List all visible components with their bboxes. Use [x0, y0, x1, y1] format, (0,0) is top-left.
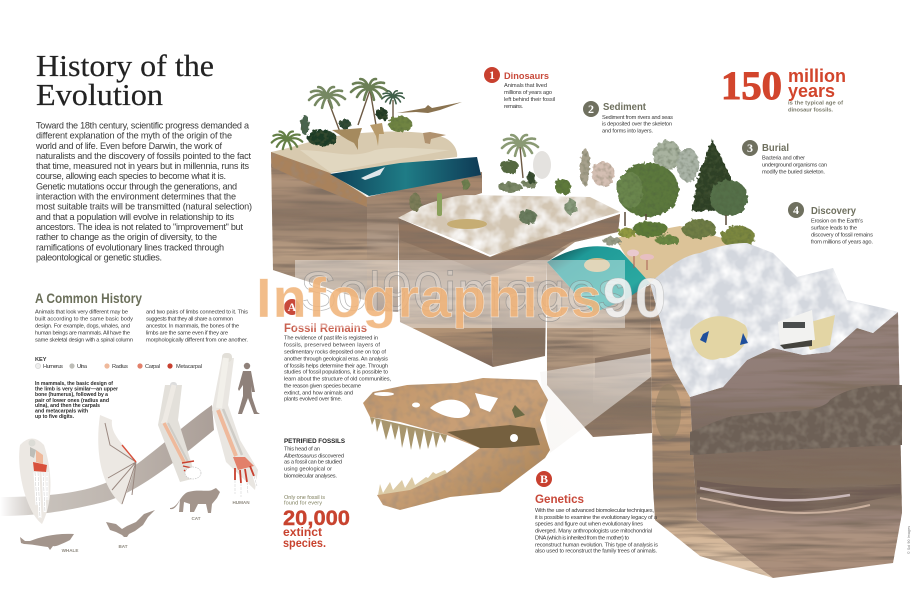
text: petrified fossils: PETRIFIED FOSSILS: [284, 438, 346, 445]
panel: genetics: With the use of advanced biomolecular techniques,: [535, 508, 654, 514]
species labels: HUMAN: [232, 500, 250, 505]
callout: 20,000 extinct species: [283, 495, 350, 550]
text: common history column 1: built according to the same basic body: [35, 316, 133, 322]
callout: 20,000 extinct species: found for every: [284, 500, 322, 506]
title: History of the: [36, 48, 214, 83]
limb: human arm: [212, 353, 258, 497]
step 3: burial: [742, 140, 827, 176]
panel: a common history: [0, 291, 260, 553]
heading: fossil remains: Fossil Remains: [284, 323, 367, 335]
skull fossil: [363, 378, 550, 510]
step 4: discovery: discovery of fossil remains: [811, 232, 873, 238]
text: fossil remains body: another through geological eras. An analysis: [284, 356, 388, 362]
silhouette: human: [238, 363, 260, 414]
panel: genetics: [535, 471, 658, 554]
heading: a common history: A Common History: [35, 291, 142, 306]
step 4: discovery: Discovery: [811, 206, 857, 217]
buried strata: [690, 385, 902, 455]
intro text block: and that a population will evolve in relationship to its: [36, 212, 234, 222]
intro text block: naturalists and the discovery of fossils pointed to the fact: [36, 151, 251, 161]
title: [36, 48, 214, 112]
text: limb design note: up to five digits.: [35, 414, 74, 420]
step 2: sediment: is deposited over the skeleton: [602, 122, 672, 128]
text: common history column 1: Animals that look very different may be: [35, 310, 128, 316]
legend: bone key: [35, 357, 202, 370]
text: limb design note: In mammals, the basic design of: [35, 381, 113, 387]
lower teeth: [378, 470, 447, 495]
icon: step 3 badge: 3: [747, 141, 753, 155]
text: fossil remains body: extinct, and how animals and: [284, 390, 353, 396]
panel: genetics: Genetics: [535, 494, 584, 506]
step 1: dinosaurs: Dinosaurs: [504, 71, 549, 82]
intro text block: different explanation of the myth of the origin of the: [36, 131, 232, 141]
intro text block: [35, 120, 252, 262]
species labels: WHALE: [62, 548, 78, 553]
text: common history column 2: suggests that they all share a common: [146, 316, 233, 322]
step 1: dinosaurs: Animals that lived: [504, 83, 547, 89]
title: Evolution: [36, 77, 164, 112]
text: petrified fossils: [283, 438, 346, 480]
text: fossil remains body: [284, 336, 391, 402]
legend: bone key: Ulna: [77, 364, 88, 370]
text: fossil remains body: fossils, preserved between layers of: [284, 342, 380, 348]
step 1: dinosaurs: millions of years ago: [504, 90, 552, 96]
watermark: Infographics90: [256, 266, 666, 329]
panel: genetics: it is possible to examine the evolutionary legacy of a: [535, 515, 658, 521]
species labels: [62, 500, 250, 553]
text: common history column 1: [35, 310, 133, 344]
fossil bed: [447, 219, 487, 229]
icon: A badge: A: [288, 300, 297, 314]
text: fossil remains body: plants evolved over time.: [284, 396, 342, 402]
intro text block: Toward the 18th century, scientific progress demanded a: [36, 120, 250, 130]
text: limb design note: and metacarpals with: [35, 409, 89, 415]
callout: 20,000 extinct species: species.: [283, 536, 326, 550]
callout: 150 million years: 150: [721, 63, 782, 108]
text: limb design note: ulna), and then the carpals: [35, 403, 100, 409]
upper teeth: [370, 417, 447, 450]
species labels: CAT: [191, 516, 201, 521]
callout: 20,000 extinct species: 20,000: [283, 506, 350, 530]
text: fossil remains body: the reason given species became: [284, 384, 361, 390]
intro text block: course, allowing each species to become what it is.: [36, 171, 226, 181]
panel: genetics: DNA (which is inherited from the mother) to: [535, 536, 629, 542]
intro text block: ramifications of evolutionary lines tracked through: [36, 242, 224, 252]
legend: bone key: Humerus: [43, 364, 63, 370]
block 4: discovery: [650, 243, 902, 578]
text: common history column 1: design. For example, dogs, whales, and: [35, 324, 130, 330]
text: fossil remains body: learn about the structure of old communities,: [284, 376, 391, 382]
intro text block: that time, measured not in years but in millennia, runs its: [36, 161, 249, 171]
text: fossil remains body: of fossils helps determine their age. Through: [284, 364, 388, 370]
step 1: dinosaurs: [484, 67, 555, 110]
intro text block: ancestors. The idea is not related to "improvement" but: [36, 222, 243, 232]
block 1: dinosaurs: [271, 79, 482, 312]
step 4: discovery: surface leads to the: [811, 226, 857, 232]
text: common history column 2: [146, 310, 248, 344]
text: common history column 1: human beings are mammals. All have the: [35, 330, 130, 336]
callout: 150 million years: is the typical age of: [788, 100, 843, 106]
panel: genetics: species and figure out when evolutionary lines: [535, 522, 643, 528]
callout: 20,000 extinct species: Only one fossil is: [284, 495, 325, 501]
step 1: dinosaurs: left behind their fossil: [504, 97, 555, 103]
step 2: sediment: Sediment: [603, 102, 647, 113]
evolution band: [0, 405, 214, 516]
text: limb design note: pair of lower ones (radius and: [35, 398, 110, 404]
intro text block: rather to change as the origin of diversity, to the: [36, 232, 217, 242]
legend: bone key: Radius: [112, 364, 128, 370]
text: fossil remains body: The evidence of past life is registered in: [284, 336, 378, 342]
block 3: lagoon: [547, 246, 654, 437]
fossil light cone: [540, 350, 680, 453]
watermark: Sol90images: [300, 260, 625, 322]
silhouette: bat: [106, 510, 155, 537]
text: limb design note: the limb is very similar—an upper: [35, 387, 119, 393]
desert plants: [409, 135, 577, 224]
step 3: burial: Burial: [762, 143, 789, 154]
text: petrified fossils: as a fossil can be studied: [284, 460, 342, 466]
step 4: discovery: Erosion on the Earth's: [811, 218, 863, 224]
rock surface: [650, 243, 898, 397]
step 4: discovery: from millions of years ago.: [811, 240, 873, 246]
palms and plants: [272, 79, 412, 149]
icon: step 4 badge: 4: [793, 203, 799, 217]
intro text block: most suitable traits will be transmitted (natural selection): [36, 202, 252, 212]
legend: bone key: Metacarpal: [176, 364, 202, 370]
icon: step 1 badge: 1: [489, 68, 495, 82]
species labels: BAT: [118, 544, 128, 549]
text: fossil remains body: sedimentary rocks deposited one on top of: [284, 350, 386, 356]
intro text block: interaction with the environment determines that the: [36, 192, 236, 202]
step 3: burial: Bacteria and other: [762, 156, 805, 162]
step 1: dinosaurs: remains.: [504, 104, 523, 110]
text: common history column 2: morphologically different from one another.: [146, 338, 248, 344]
dinosaurs: [332, 102, 462, 150]
text: petrified fossils: This head of an: [284, 446, 320, 452]
panel: genetics: diverged. Many anthropologists use mitochondrial: [535, 528, 652, 534]
text: common history column 2: limbs are the same even if they are: [146, 330, 228, 336]
text: limb design note: bone (humerus), followed by a: [35, 392, 109, 398]
step 2: sediment: and forms into layers.: [602, 128, 653, 134]
silhouette: cat: [170, 488, 220, 513]
text: limb design note: [35, 381, 119, 420]
silhouette: whale: [20, 534, 74, 550]
legend: bone key: KEY: [35, 357, 47, 363]
intro text block: world and of life. Even before Darwin, the work of: [35, 141, 222, 151]
callout: 150 million years: years: [788, 81, 835, 101]
step 3: burial: modify the buried skeleton.: [762, 170, 825, 176]
step 4: discovery: [788, 202, 873, 246]
text: petrified fossils: using geological or: [284, 466, 332, 472]
panel: fossil remains: [284, 299, 391, 402]
callout: 150 million years: million: [788, 66, 846, 86]
limb: cat foreleg: [158, 382, 201, 482]
step 3: burial: underground organisms can: [762, 162, 827, 168]
limb: bat wing: [98, 415, 136, 505]
limb: whale flipper: [19, 438, 50, 524]
text: petrified fossils: biomolecular analyses.: [284, 474, 337, 480]
intro text block: Genetic mutations occur through the generations, and: [36, 181, 237, 191]
flamingos: [627, 250, 654, 270]
text: petrified fossils: Albertosaurus discovered: [283, 454, 344, 460]
callout: 150 million years: dinosaur fossils.: [788, 108, 833, 114]
step 2: sediment: Sediment from rivers and seas: [602, 115, 673, 121]
callout: 150 million years: [721, 63, 846, 114]
image credit: © Sol 90 Images: [907, 526, 911, 554]
field vehicle: [778, 310, 815, 349]
icon: step 2 badge: 2: [588, 102, 594, 116]
water: sea: [330, 157, 481, 196]
text: common history column 2: ancestor. In mammals, the bones of the: [146, 324, 239, 330]
callout: 20,000 extinct species: extinct: [283, 525, 322, 539]
text: common history column 1: same skeletal design with a spinal column: [35, 338, 133, 344]
field workers: [700, 331, 748, 345]
step 2: sediment: [583, 101, 673, 134]
intro text block: paleontological or genetic studies.: [36, 252, 162, 262]
legend: bone key: Carpal: [145, 364, 160, 370]
text: common history column 2: and two pairs of limbs connected to it. This: [146, 310, 248, 316]
panel: genetics: reconstruct human evolution. This type of analysis is: [535, 542, 658, 548]
block 2: sediment: [398, 135, 620, 367]
trees and background: [580, 139, 760, 290]
text: fossil remains body: studies of fossil populations, it is possible to: [284, 370, 388, 376]
icon: B badge: B: [540, 472, 548, 486]
panel: genetics: also used to reconstruct the family trees of animals.: [535, 548, 657, 554]
